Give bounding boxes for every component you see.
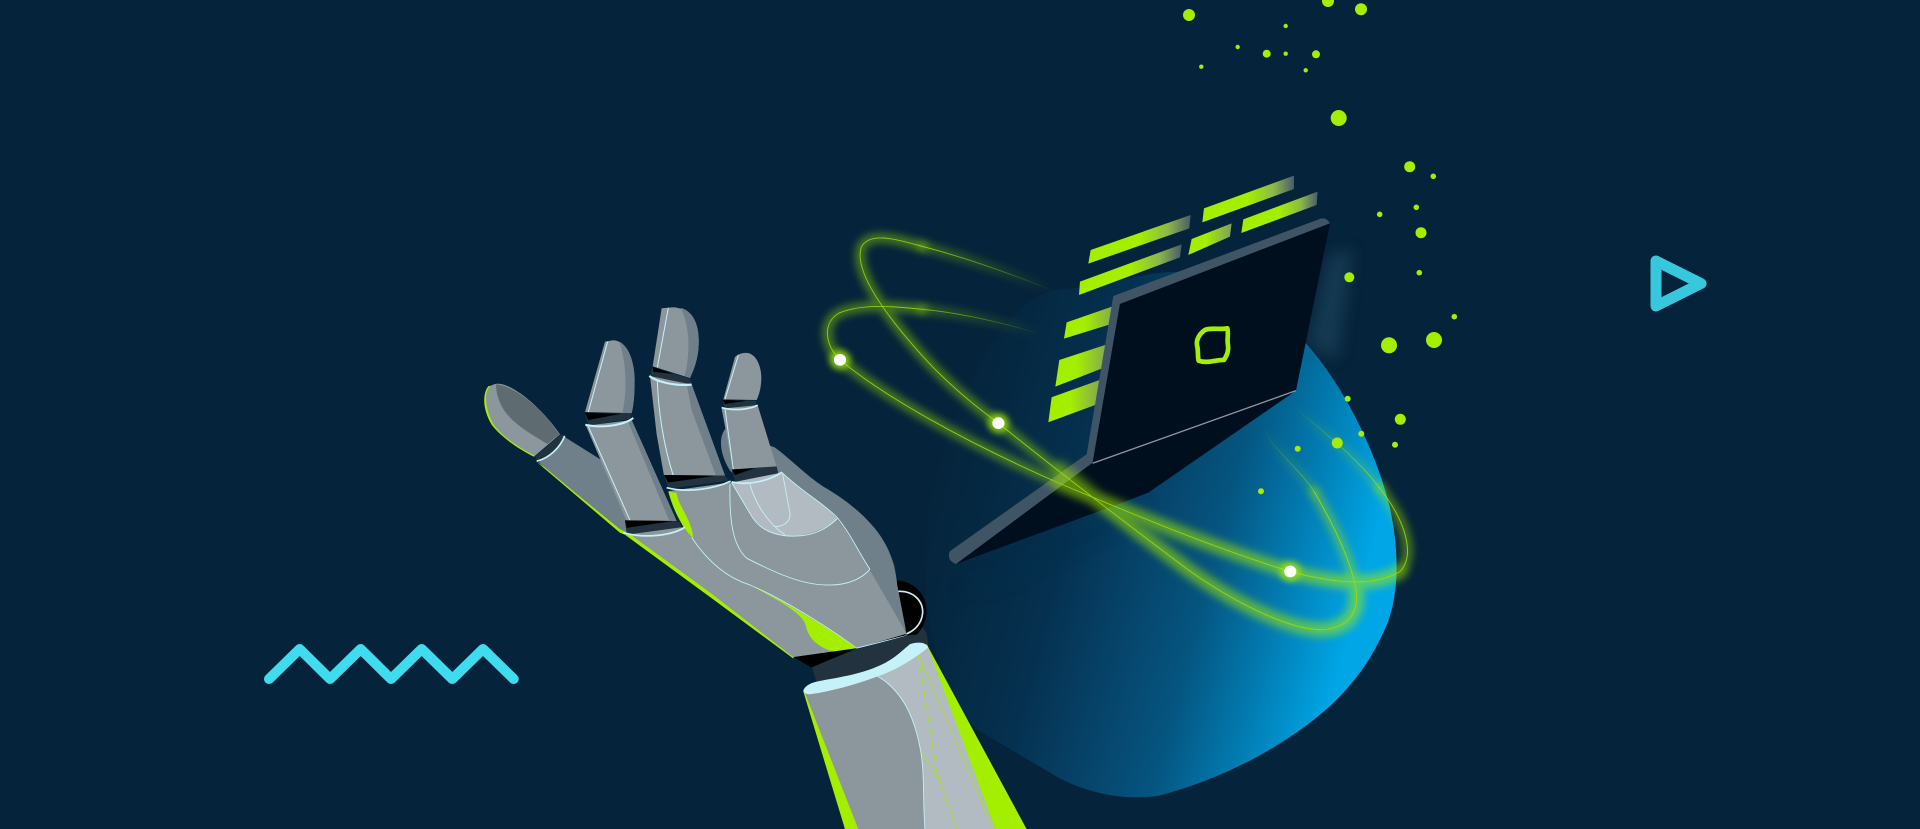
forearm <box>803 643 1027 829</box>
glowing node: planet <box>1280 561 1301 582</box>
lime palm accents <box>668 492 857 652</box>
glowing node: centre <box>988 413 1009 433</box>
wrist joint <box>867 541 928 646</box>
laptop frame <box>949 218 1330 564</box>
decorative play triangle <box>1656 261 1701 306</box>
little finger <box>722 353 782 483</box>
laptop shadows <box>957 250 1353 590</box>
laptop <box>949 218 1330 564</box>
robotic hand <box>484 307 1027 829</box>
index finger <box>585 340 685 536</box>
lime edge <box>537 462 797 659</box>
hinge line <box>1093 391 1296 463</box>
glowing node: upper left <box>829 350 851 370</box>
wrist band <box>793 634 928 683</box>
hand back <box>721 429 907 636</box>
palm <box>625 472 907 657</box>
orbit tail glow <box>922 246 1380 492</box>
palm light pad <box>732 472 837 536</box>
middle finger <box>649 307 731 490</box>
laptop base <box>956 391 1296 564</box>
orbit line two <box>827 306 1407 582</box>
thumb <box>484 384 565 463</box>
decorative zigzag <box>269 649 514 679</box>
icon: logo <box>1197 328 1228 362</box>
floating particles <box>1183 0 1457 494</box>
thumb base <box>537 436 677 532</box>
planet <box>925 272 1397 797</box>
palm shade <box>870 570 906 630</box>
laptop screen <box>1093 223 1330 463</box>
palm lines <box>692 472 907 648</box>
data bars <box>1048 176 1318 422</box>
orbit glow <box>827 238 1407 630</box>
orbit line one <box>860 238 1357 630</box>
orbit wide glow <box>1061 469 1400 630</box>
glowing orbits <box>827 238 1407 630</box>
